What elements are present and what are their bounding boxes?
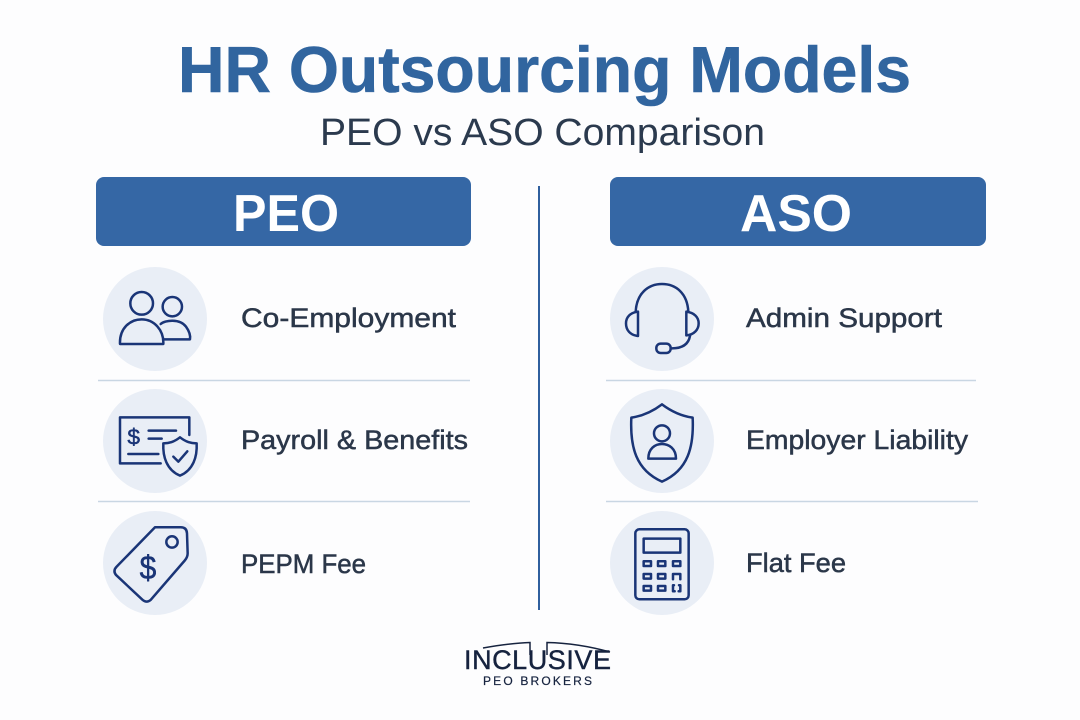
row: Admin Support: Admin Support xyxy=(746,303,943,333)
icon: price tag xyxy=(114,527,188,602)
icon: calculator xyxy=(635,529,689,599)
ASO header xyxy=(610,177,986,246)
icon: headset xyxy=(626,284,699,353)
PEO header: PEO xyxy=(233,185,339,243)
row: PEPM Fee xyxy=(103,511,366,615)
icon: payroll check with shield xyxy=(120,417,197,476)
row: Payroll & Benefits xyxy=(103,389,468,493)
icon: price tag: $ xyxy=(140,550,156,587)
icon: payroll check with shield: $ xyxy=(127,425,140,450)
logo: Inclusive PEO Brokers xyxy=(464,642,611,688)
row: Co-Employment xyxy=(103,267,457,371)
logo: Inclusive PEO Brokers: INCLUSIVE xyxy=(464,645,611,675)
title: HR Outsourcing Models xyxy=(178,33,911,106)
row: Payroll & Benefits: Payroll & Benefits xyxy=(241,425,468,455)
subtitle: PEO vs ASO Comparison xyxy=(320,112,765,154)
row: Flat Fee: Flat Fee xyxy=(746,548,846,578)
logo: Inclusive PEO Brokers: PEO BROKERS xyxy=(483,674,592,688)
panel: ASO xyxy=(606,177,986,615)
row: Flat Fee xyxy=(610,511,846,615)
ASO header: ASO xyxy=(740,185,852,243)
icon: two people xyxy=(120,292,190,344)
row: Co-Employment: Co-Employment xyxy=(241,303,457,333)
PEO header xyxy=(96,177,471,246)
row: Employer Liability: Employer Liability xyxy=(746,425,969,455)
icon: shield with person xyxy=(631,404,693,482)
row: Admin Support xyxy=(610,267,943,371)
center divider xyxy=(538,186,540,610)
row: PEPM Fee: PEPM Fee xyxy=(241,549,366,579)
panel: PEO xyxy=(96,177,471,615)
row: Employer Liability xyxy=(610,389,969,493)
